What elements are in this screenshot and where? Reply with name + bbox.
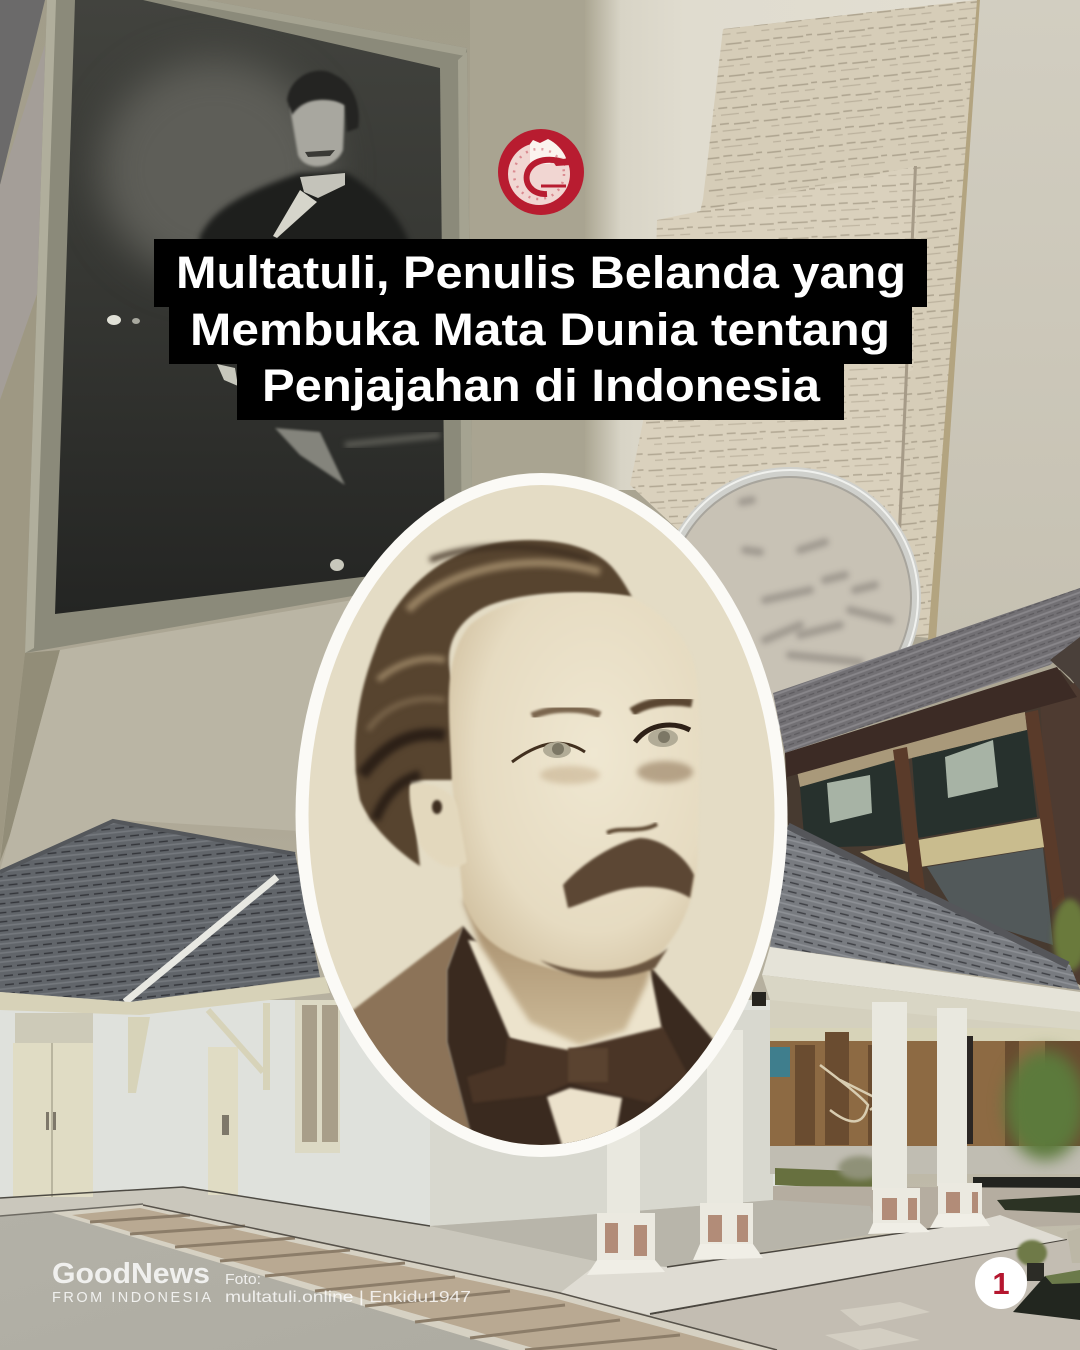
ear <box>409 784 467 867</box>
pebble walkway <box>50 1204 777 1350</box>
magnifying glass <box>659 467 921 729</box>
upper building, right <box>773 588 1080 985</box>
upper roof <box>773 588 1080 753</box>
title line 1: Multatuli, Penulis Belanda yang <box>176 247 906 298</box>
neck <box>463 900 660 1045</box>
right roof <box>752 825 1080 1030</box>
photo credit: Foto: <box>225 1271 261 1288</box>
painting interior <box>100 60 440 571</box>
potted plants, bottom right <box>1013 1228 1080 1320</box>
title line 2: Membuka Mata Dunia tentang <box>190 304 890 355</box>
shrub, right <box>1053 899 1080 971</box>
photo credit <box>225 1271 471 1306</box>
logo: red eagle G emblem <box>498 129 584 215</box>
mustache <box>563 838 694 908</box>
manuscript pages <box>630 0 980 640</box>
left building doors and window <box>0 1000 430 1226</box>
hair <box>355 540 632 866</box>
photo credit: multatuli.online | Enkidu1947 <box>225 1289 471 1306</box>
shirt collar <box>468 940 662 1062</box>
brand footer: FROM INDONESIA <box>52 1290 211 1306</box>
jacket tweed <box>352 926 471 1130</box>
page number badge <box>975 1257 1027 1309</box>
face <box>449 593 700 974</box>
brand footer: GoodNews <box>52 1258 210 1290</box>
terrace floor <box>430 1200 1080 1350</box>
title <box>154 239 927 420</box>
page number badge: 1 <box>992 1266 1010 1301</box>
title line 1 <box>154 239 927 307</box>
nose <box>607 824 657 833</box>
brand footer <box>52 1258 211 1306</box>
brows and eyes <box>532 709 600 716</box>
right wooden wall and garden <box>770 1000 1080 1233</box>
portrait white frame <box>296 473 788 1157</box>
bow tie <box>467 1027 688 1103</box>
shirt front <box>547 1088 622 1155</box>
sepia portrait photo <box>308 485 774 1145</box>
roof fascia <box>785 667 1077 777</box>
lower building, white walls and terrace <box>0 1000 800 1350</box>
title line 3: Penjajahan di Indonesia <box>262 360 821 411</box>
jacket dark lapels <box>446 925 714 1145</box>
left roof <box>0 820 330 1015</box>
chin shadow <box>540 948 668 978</box>
portrait medallion <box>290 470 790 1160</box>
porch pillars <box>587 1002 990 1275</box>
framed portrait painting <box>25 0 473 653</box>
